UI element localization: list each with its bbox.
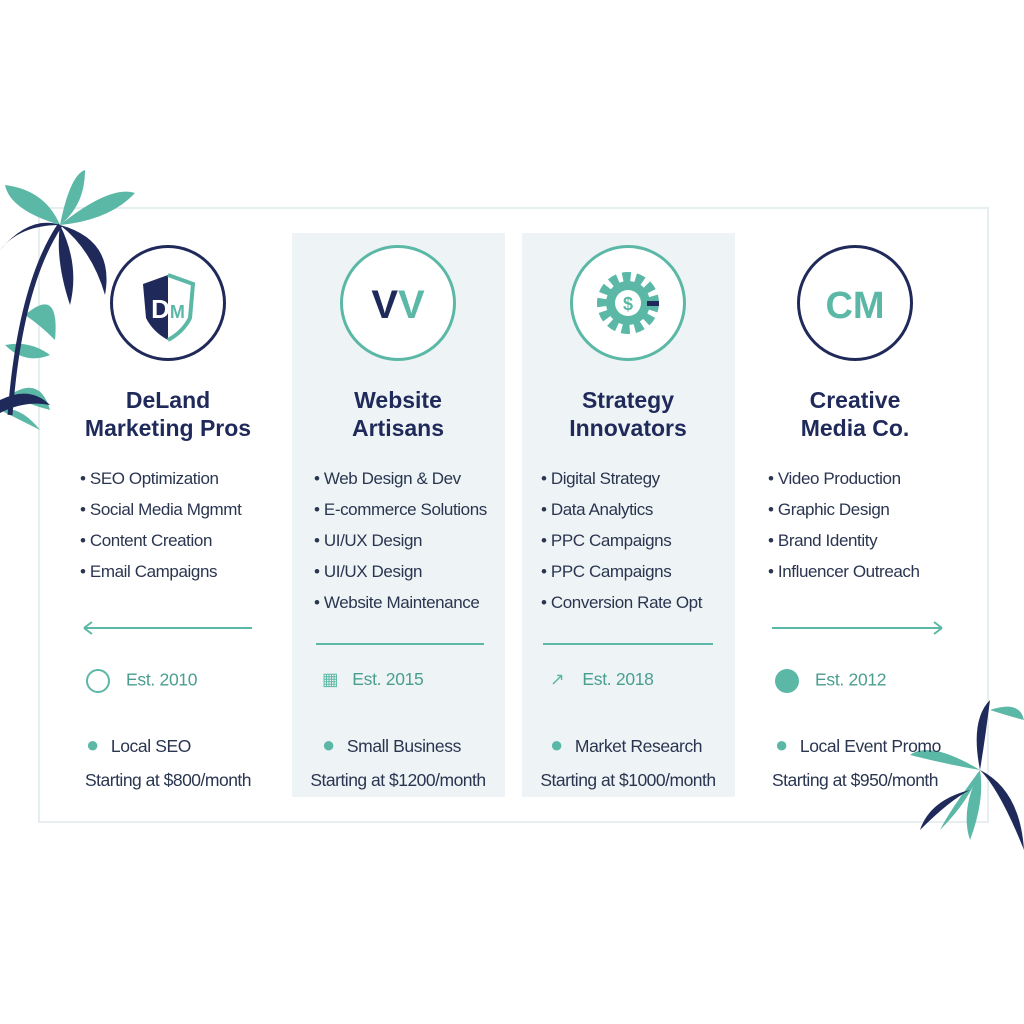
logo 1: DM (151, 294, 185, 324)
services 3: Conversion Rate Opt (551, 593, 702, 612)
arrow right (772, 621, 942, 635)
services 1: Social Media Mgmmt (90, 500, 241, 519)
title 3: Strategy (582, 387, 674, 413)
services 2: E-commerce Solutions (324, 500, 487, 519)
services 4: Video Production (778, 469, 901, 488)
title 3: Innovators (569, 415, 687, 441)
title 4 (801, 387, 909, 441)
location 3: ● Market Research (550, 732, 702, 757)
title 1 (85, 387, 251, 441)
est 4: Est. 2012 (815, 670, 886, 690)
title 2: Artisans (352, 415, 444, 441)
services 3: Digital Strategy (551, 469, 660, 488)
est 1 (86, 669, 197, 693)
est 4 (775, 669, 886, 693)
column shade 3 (522, 233, 735, 797)
title 2: Website (354, 387, 442, 413)
column 3: Strategy Innovators: $ (623, 294, 633, 314)
services 3: PPC Campaigns (551, 531, 671, 550)
services 3: Data Analytics (551, 500, 653, 519)
services 2: UI/UX Design (324, 562, 422, 581)
outer frame (38, 207, 989, 823)
est 3: ↗ Est. 2018 (550, 669, 654, 689)
column shade 2 (292, 233, 505, 797)
title 3 (569, 387, 687, 441)
location 2: ● Small Business (322, 732, 461, 757)
services 4: Graphic Design (778, 500, 889, 519)
column 2: Website Artisans (340, 245, 456, 361)
services 2: Web Design & Dev (324, 469, 461, 488)
price 3: Starting at $1000/month (540, 770, 716, 790)
services 2: Website Maintenance (324, 593, 479, 612)
arrow left (84, 621, 252, 635)
services 1: SEO Optimization (90, 469, 219, 488)
divider 2 (316, 643, 484, 645)
title 2 (352, 387, 444, 441)
services 3: PPC Campaigns (551, 562, 671, 581)
price 2: Starting at $1200/month (310, 770, 486, 790)
services 4: Brand Identity (778, 531, 877, 550)
column 1: DeLand Marketing Pros (110, 245, 226, 361)
price 4: Starting at $950/month (772, 770, 938, 790)
title 4: Media Co. (801, 415, 909, 441)
services 2: UI/UX Design (324, 531, 422, 550)
column 4: Creative Media Co.: CM (825, 285, 885, 327)
services 3 (542, 469, 702, 612)
title 1: DeLand (126, 387, 210, 413)
services 4 (768, 469, 920, 581)
est 2: ▦ Est. 2015 (322, 669, 424, 689)
location 1: ● Local SEO (86, 732, 191, 757)
est 1: Est. 2010 (126, 670, 197, 690)
title 4: Creative (810, 387, 900, 413)
column 2: Website Artisans: VV (371, 283, 425, 327)
column 4: Creative Media Co. (797, 245, 913, 361)
column 3: Strategy Innovators (570, 245, 686, 361)
divider 3 (543, 643, 713, 645)
location 4: ● Local Event Promo (775, 732, 941, 757)
services 4: Influencer Outreach (778, 562, 920, 581)
price 1: Starting at $800/month (85, 770, 251, 790)
logo 1 (110, 245, 226, 361)
palm tree bottom-right (910, 700, 1024, 850)
title 1: Marketing Pros (85, 415, 251, 441)
palm tree top-left (0, 170, 135, 430)
services 1: Content Creation (90, 531, 212, 550)
services 1: Email Campaigns (90, 562, 217, 581)
services 1 (80, 469, 242, 581)
services 2 (314, 469, 487, 612)
